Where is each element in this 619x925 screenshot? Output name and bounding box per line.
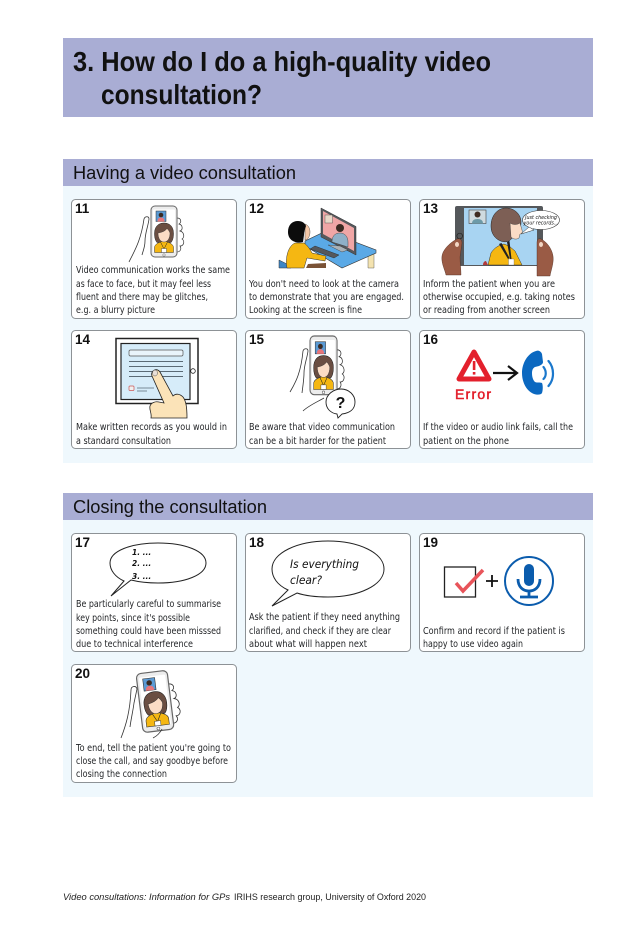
caption <box>76 265 230 316</box>
panel: closing the consultation <box>63 493 593 797</box>
icon: speech bubble: clear? <box>290 573 322 587</box>
icon: tablet with tapping hand <box>116 338 198 418</box>
caption <box>76 599 221 650</box>
caption: as face to face, but it may feel less <box>76 279 211 290</box>
caption: something could have been misssed <box>76 626 221 637</box>
card 20: 20 <box>75 666 90 681</box>
caption <box>423 626 565 650</box>
card 15 <box>246 330 410 448</box>
caption <box>248 279 404 316</box>
plus sign <box>486 575 498 587</box>
caption: key points, since it's possible <box>76 613 190 624</box>
panel background <box>63 520 593 797</box>
card 16 <box>420 330 584 448</box>
icon: numbered list speech bubble <box>110 543 206 596</box>
hand holding phone <box>121 686 162 738</box>
icon: numbered list speech bubble: 3. ... <box>132 572 151 581</box>
caption: otherwise occupied, e.g. taking notes <box>423 292 575 303</box>
icon: error triangle: Error <box>455 386 491 402</box>
icon: question speech bubble: ? <box>336 395 345 412</box>
caption: or reading from another screen <box>423 305 550 316</box>
icon: tablet with doctor and speech bubble: Just checking <box>524 215 557 221</box>
icon: numbered list speech bubble: 1. ... <box>132 548 151 557</box>
caption <box>423 279 575 316</box>
caption: If the video or audio link fails, call the <box>423 422 573 433</box>
card 12 <box>246 200 410 318</box>
card 19: 19 <box>423 535 438 550</box>
caption <box>249 422 395 447</box>
caption <box>423 422 573 447</box>
caption: about what will happen next <box>249 639 367 650</box>
footer: Video consultations: Information for GPs <box>63 892 230 903</box>
icon: numbered list speech bubble: 2. ... <box>132 559 151 568</box>
caption: Be particularly careful to summarise <box>76 599 221 610</box>
caption: patient on the phone <box>423 436 509 447</box>
card 17 <box>72 534 236 652</box>
card 18: 18 <box>249 535 265 550</box>
icon: telephone <box>522 351 553 395</box>
title banner: consultation? <box>101 79 262 110</box>
card 11 <box>72 200 236 318</box>
footer <box>63 892 426 903</box>
icon: tablet with doctor and speech bubble: your records... <box>523 220 558 226</box>
section heading <box>63 159 593 186</box>
caption: Be aware that video communication <box>249 422 395 433</box>
card 18 <box>246 534 410 652</box>
card 11: 11 <box>75 201 90 216</box>
caption: You don't need to look at the camera <box>248 279 399 290</box>
icon: speech bubble <box>272 541 384 606</box>
card 13 <box>420 200 584 318</box>
caption: can be a bit harder for the patient <box>249 436 386 447</box>
caption: a standard consultation <box>76 436 171 447</box>
card 17: 17 <box>75 535 90 550</box>
icon: red tick in box <box>444 567 483 597</box>
caption <box>75 743 231 780</box>
card 20 <box>72 664 236 782</box>
caption: clarified, and check if they are clear <box>249 626 391 637</box>
footer: IRIHS research group, University of Oxford 2020 <box>234 892 426 903</box>
section heading <box>63 493 593 520</box>
hand holding phone <box>290 349 324 411</box>
icon: tilted phone video call <box>136 669 182 733</box>
card 13: 13 <box>423 201 439 216</box>
card 12: 12 <box>249 201 264 216</box>
icon: question speech bubble <box>326 389 355 418</box>
title banner <box>63 38 593 117</box>
caption: e.g. a blurry picture <box>76 305 155 316</box>
section heading: Having a video consultation <box>73 163 296 183</box>
caption: due to technical interference <box>76 639 193 650</box>
icon: phone video call <box>151 206 184 257</box>
card 14: 14 <box>75 332 91 347</box>
caption: closing the connection <box>76 769 167 780</box>
caption: Make written records as you would in <box>76 422 227 433</box>
section heading: Closing the consultation <box>73 497 267 517</box>
icon: person at desk with monitor <box>279 208 376 268</box>
icon: phone video call <box>310 336 344 395</box>
caption: Confirm and record if the patient is <box>423 626 565 637</box>
caption: happy to use video again <box>423 639 523 650</box>
card 14 <box>72 330 236 448</box>
card 16: 16 <box>423 332 439 347</box>
icon: microphone <box>505 557 553 605</box>
caption: Inform the patient when you are <box>423 279 555 290</box>
caption: fluent and there may be glitches, <box>76 292 208 303</box>
caption: Ask the patient if they need anything <box>249 612 400 623</box>
title banner: 3. How do I do a high-quality video <box>73 46 491 77</box>
panel: having a video consultation <box>63 159 593 463</box>
caption <box>76 422 227 447</box>
card 19 <box>420 534 584 652</box>
icon: speech bubble: Is everything <box>290 557 359 571</box>
icon: tablet with doctor and speech bubble <box>442 206 560 276</box>
panel background <box>63 186 593 463</box>
caption: To end, tell the patient you're going to <box>75 743 231 754</box>
arrow <box>493 366 517 380</box>
card 15: 15 <box>249 332 265 347</box>
icon: error triangle <box>455 352 491 402</box>
hand holding phone <box>129 217 149 262</box>
caption: Video communication works the same <box>76 265 230 276</box>
caption: to demonstrate that you are engaged. <box>249 292 404 303</box>
caption: Looking at the screen is fine <box>249 305 362 316</box>
caption <box>249 612 400 650</box>
caption: close the call, and say goodbye before <box>76 756 228 767</box>
